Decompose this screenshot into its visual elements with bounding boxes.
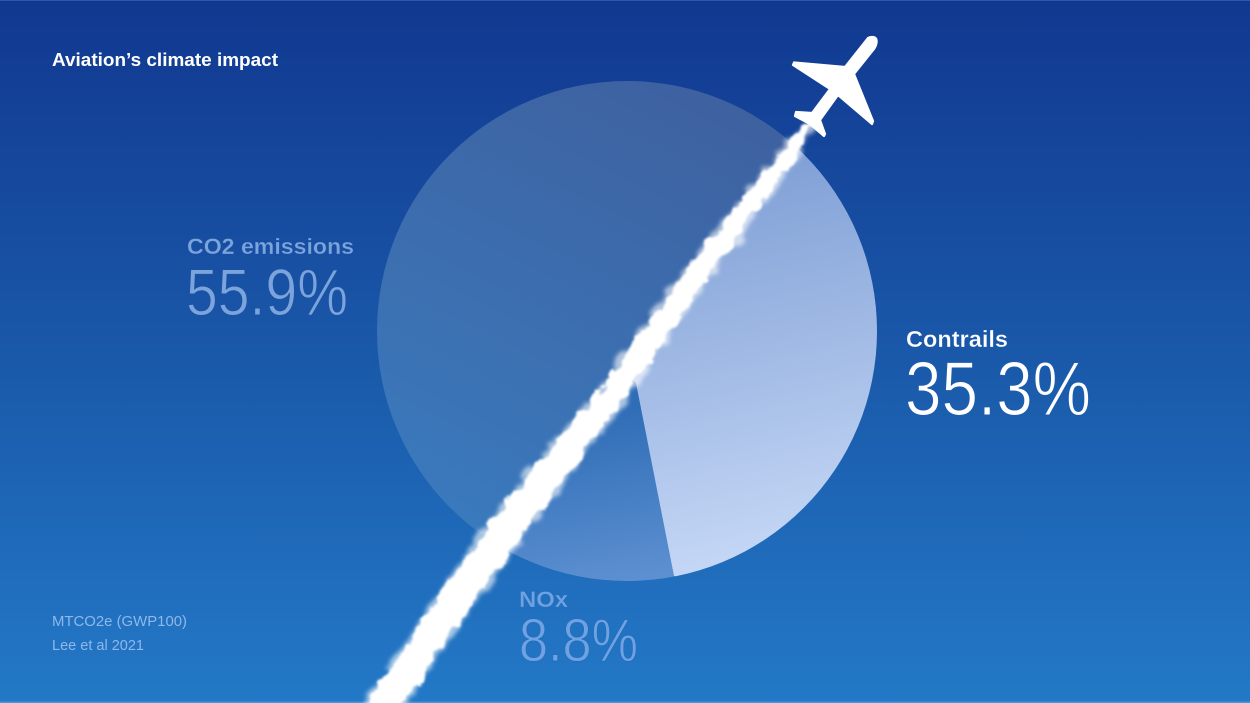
pie slice: CO2 emissions [377,81,789,536]
label: Contrails: Contrails [906,326,1008,352]
title: Aviation’s climate impact [52,50,278,70]
label: NOx: NOx [519,587,569,612]
source note: MTCO2e (GWP100) [52,613,187,630]
pie slice: contrails [632,149,877,576]
label: NOx: 8.8% [519,607,638,674]
pie slice: NOx [508,382,674,581]
label: NOx [519,587,638,674]
contrail [352,125,816,703]
label: Contrails: 35.3% [905,347,1091,432]
pie chart [377,81,877,581]
icon: airplane [793,37,877,136]
label: CO2 emissions: 55.9% [186,255,348,329]
source note: Lee et al 2021 [52,637,144,654]
source note [52,613,187,654]
label: CO2 emissions: CO2 emissions [187,234,354,259]
